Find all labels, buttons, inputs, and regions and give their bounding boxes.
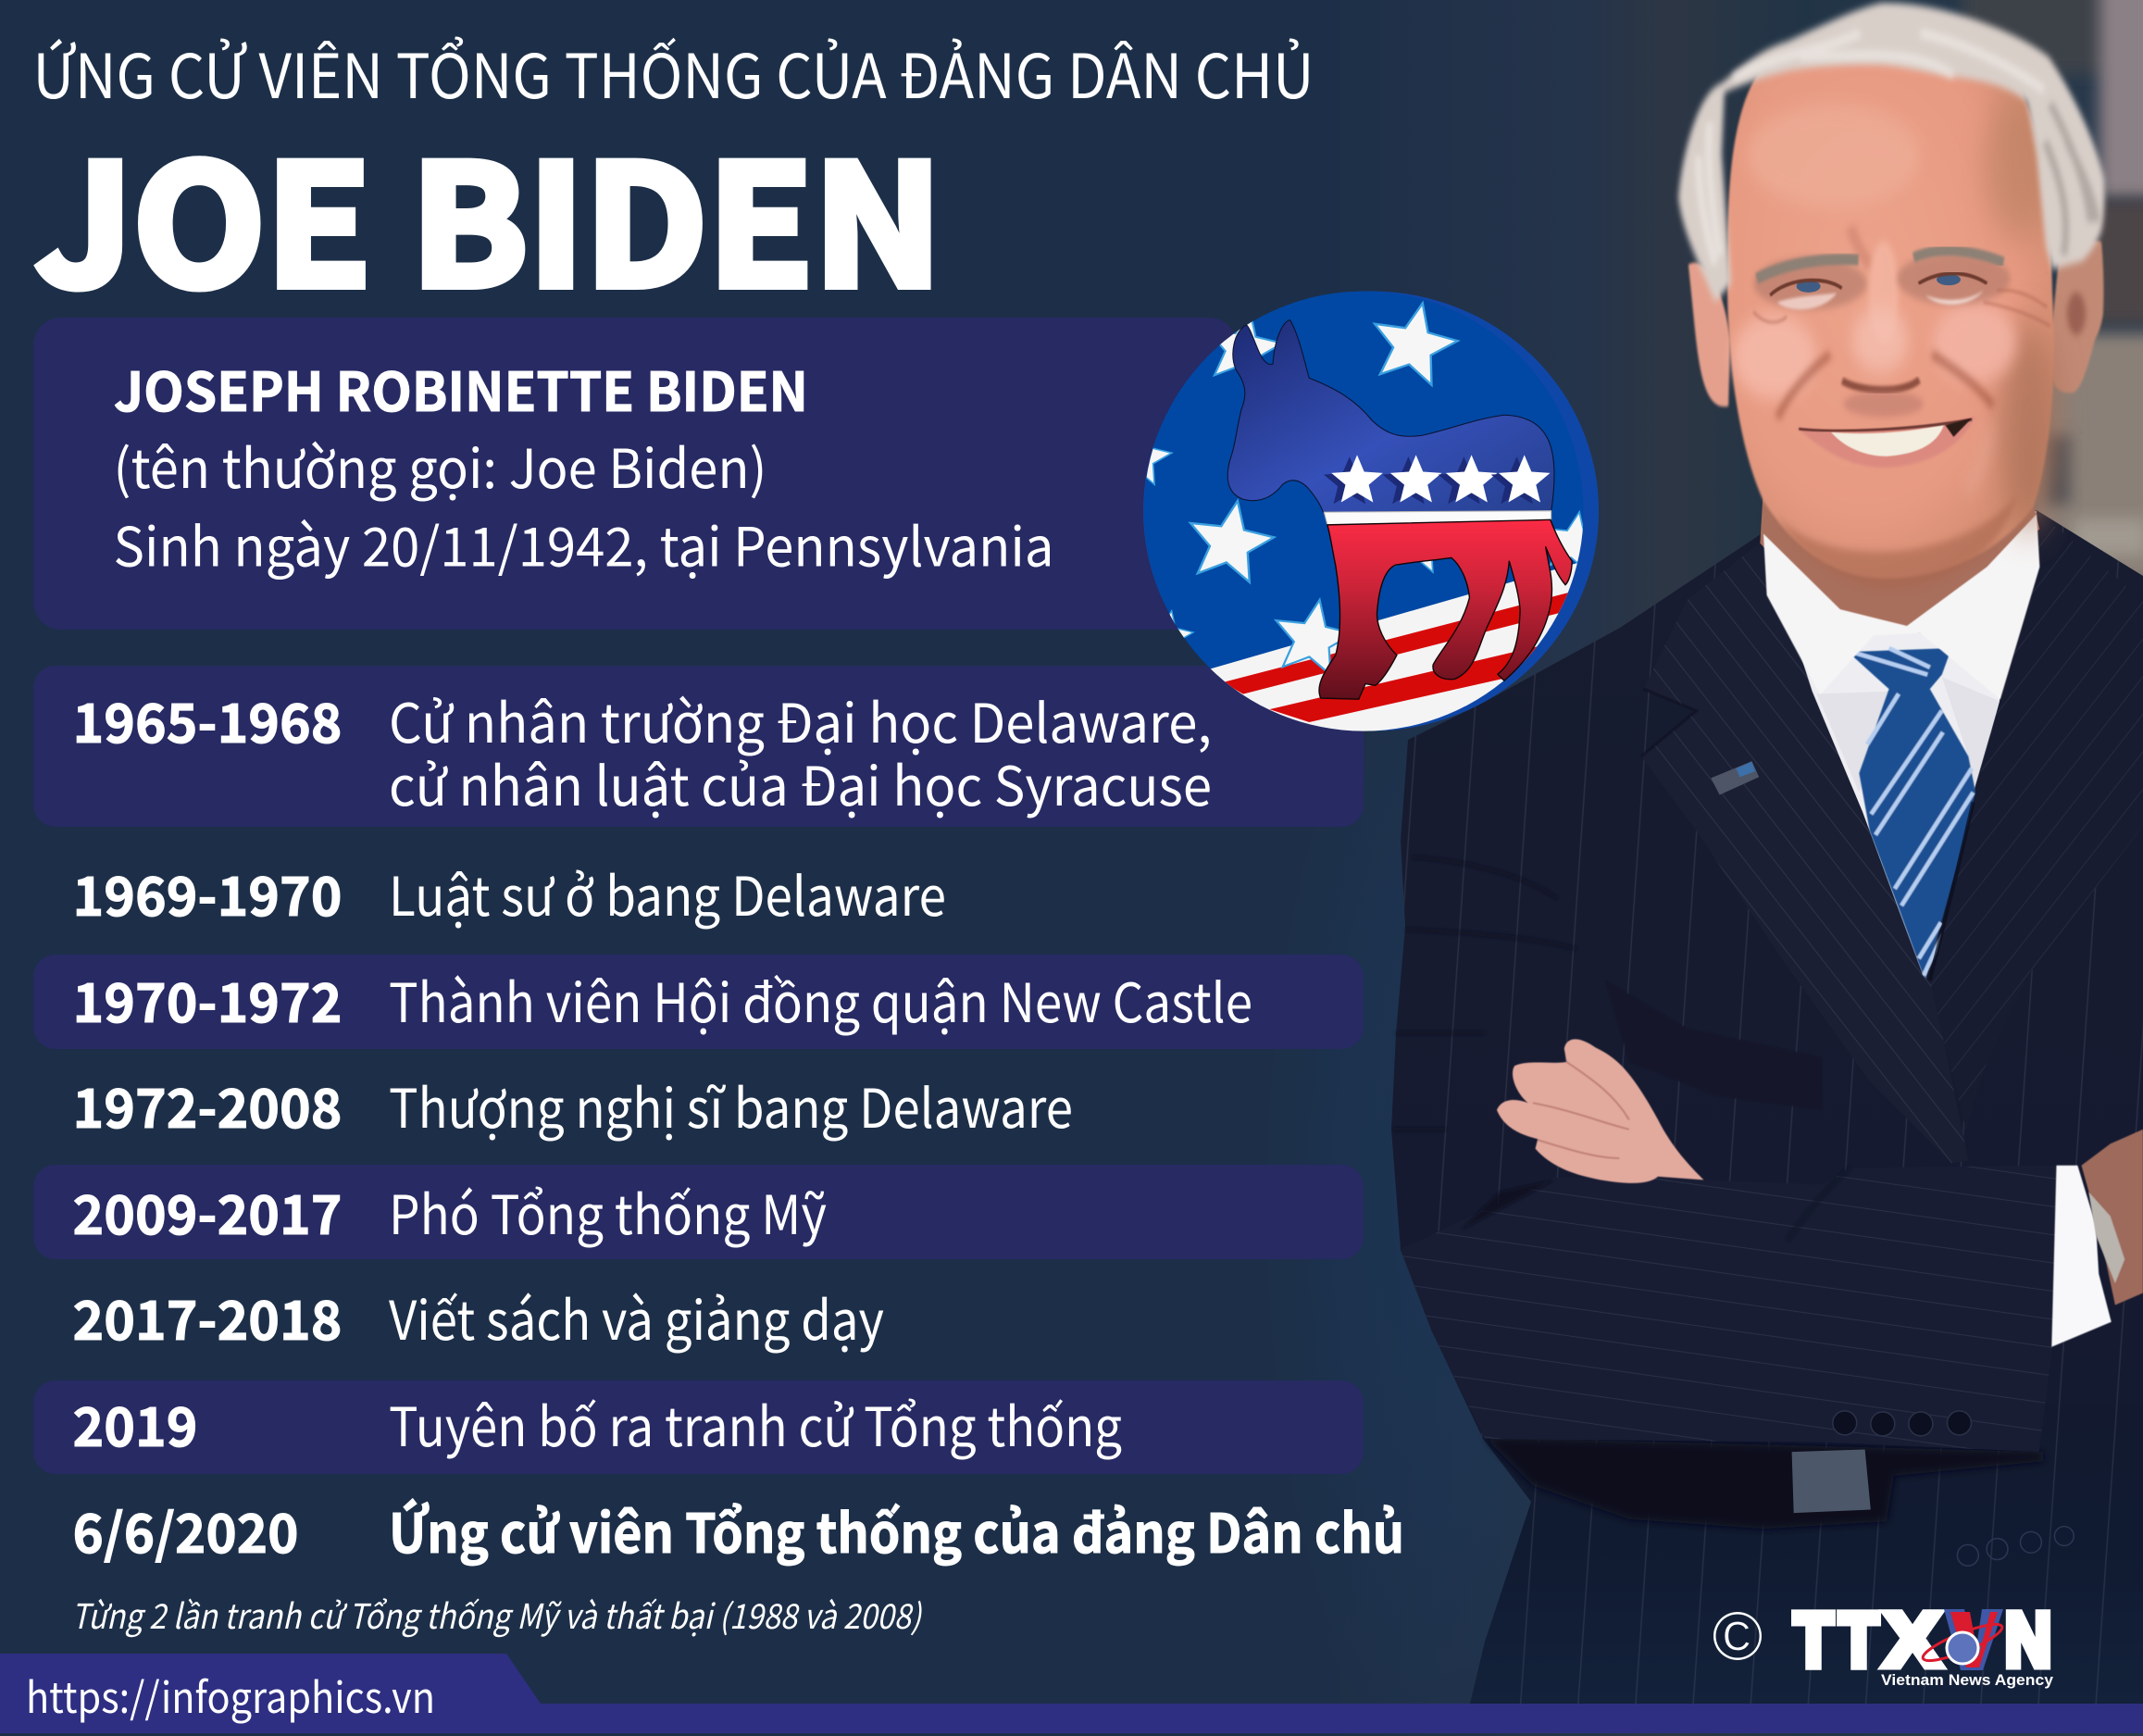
eye sockets — [1753, 257, 1867, 309]
right jaw shading — [1999, 321, 2059, 529]
row 2009-2017 — [33, 1165, 1364, 1259]
shirt patch below arm — [1792, 1449, 1871, 1513]
row 2017-2018: Viết sách và giảng dạy — [389, 1278, 884, 1355]
copyright mark: © — [1712, 1597, 1763, 1675]
hand on the arm — [1497, 1039, 1703, 1183]
donkey stars — [1324, 455, 1551, 504]
neck — [1760, 463, 2039, 633]
suit jacket — [1391, 510, 2143, 1704]
row 1965-1968 — [33, 666, 1364, 827]
ears — [1688, 263, 1730, 406]
forehead crease — [1850, 227, 1872, 265]
brow bridge highlight — [1868, 241, 1899, 344]
necktie — [1848, 648, 1975, 980]
logo: TTXVN Vietnam News Agency: T — [1839, 1598, 1878, 1682]
logo: TTXVN Vietnam News Agency: Vietnam News Agency — [1881, 1671, 2054, 1689]
row 1969-1970: 1969-1970 — [72, 854, 343, 931]
row 2019 — [33, 1380, 1364, 1474]
headline name: JOE BIDEN — [35, 93, 942, 333]
cheek highlights — [1733, 314, 1816, 399]
footer band with url — [0, 1654, 2143, 1733]
flag stripes — [1211, 563, 1577, 731]
wrist — [2082, 1130, 2143, 1305]
row 1965-1968: cử nhân luật của Đại học Syracuse — [389, 743, 1212, 821]
row 2017-2018 — [72, 1278, 884, 1355]
row 1970-1972: 1970-1972 — [72, 960, 343, 1038]
subtitle: ỨNG CỬ VIÊN TỔNG THỐNG CỦA ĐẢNG DÂN CHỦ — [33, 28, 1314, 117]
timeline — [33, 666, 1404, 1568]
sleeve fold shadows — [1393, 857, 1576, 1130]
donkey body — [1227, 320, 1572, 699]
chin shadow — [1776, 496, 2017, 589]
hair strands — [1699, 33, 2044, 265]
row 6/6/2020: 6/6/2020 — [72, 1491, 298, 1568]
title — [33, 28, 1314, 333]
watch — [2088, 1192, 2124, 1283]
eyes — [1770, 273, 1987, 309]
row 1965-1968: Cử nhân trường Đại học Delaware, — [389, 681, 1212, 758]
smile folds — [1777, 355, 1993, 418]
shirt front — [1763, 511, 2037, 980]
crow's feet — [1753, 290, 2050, 326]
breast pocket — [1605, 980, 1822, 1110]
row 2019: 2019 — [72, 1384, 198, 1462]
common name: (tên thường gọi: Joe Biden) — [113, 426, 766, 504]
row 2017-2018: 2017-2018 — [72, 1278, 343, 1355]
row 2009-2017: Phó Tổng thống Mỹ — [389, 1172, 827, 1250]
icon: Democratic donkey badge — [1143, 291, 1600, 731]
panel: identity — [33, 318, 1237, 630]
crossed forearm sleeve — [1401, 1166, 2058, 1452]
logo: TTXVN Vietnam News Agency: N — [2005, 1598, 2051, 1682]
row 2019: Tuyên bố ra tranh cử Tổng thống — [389, 1384, 1122, 1462]
row 1970-1972 — [33, 955, 1364, 1049]
lapel pin — [1711, 761, 1759, 795]
hair — [1678, 3, 2104, 303]
jacket details in close-up coordinates — [1393, 511, 2143, 1566]
row 1969-1970: Luật sư ở bang Delaware — [389, 854, 946, 931]
eyebrows — [1757, 259, 1859, 279]
face — [1727, 50, 2054, 579]
flag stars — [1107, 294, 1611, 678]
logo: TTXVN Vietnam News Agency: X — [1885, 1598, 1940, 1682]
lower buttons — [1957, 1527, 2074, 1566]
row 1972-2008 — [72, 1066, 1073, 1143]
portrait of Joe Biden — [1391, 3, 2143, 1704]
logo: TTXVN Vietnam News Agency: T — [1794, 1598, 1833, 1682]
right shirt cuff — [2051, 1166, 2112, 1347]
footer band with url: https://infographics.vn — [26, 1665, 435, 1726]
nose — [1851, 307, 1909, 373]
shadow under arm — [1485, 1437, 2043, 1529]
row 1972-2008: Thượng nghị sĩ bang Delaware — [389, 1066, 1073, 1143]
head — [1678, 3, 2104, 699]
footnote: Từng 2 lần tranh cử Tổng thống Mỹ và thất bại (1988 và 2008) — [71, 1589, 922, 1639]
row 6/6/2020: Ứng cử viên Tổng thống của đảng Dân chủ — [389, 1491, 1404, 1568]
row 1970-1972: Thành viên Hội đồng quận New Castle — [389, 960, 1252, 1038]
shirt collar top — [1763, 514, 2039, 699]
birth: Sinh ngày 20/11/1942, tại Pennsylvania — [113, 504, 1053, 581]
right lapel — [1930, 511, 2143, 1130]
forehead highlight — [1747, 104, 1920, 207]
full name: JOSEPH ROBINETTE BIDEN — [114, 349, 808, 427]
left lapel — [1641, 540, 1968, 1163]
row 1972-2008: 1972-2008 — [72, 1066, 343, 1143]
right temple shading — [1984, 90, 2057, 241]
row 2009-2017: 2009-2017 — [72, 1172, 343, 1250]
photo backdrop: blurred room behind the portrait — [1390, 0, 2143, 1559]
row 1965-1968: 1965-1968 — [72, 681, 343, 758]
row 1969-1970 — [72, 854, 946, 931]
mouth — [1797, 417, 1975, 468]
jacket buttons — [1833, 1411, 1971, 1436]
logo: TTXVN Vietnam News Agency — [1794, 1598, 2054, 1689]
